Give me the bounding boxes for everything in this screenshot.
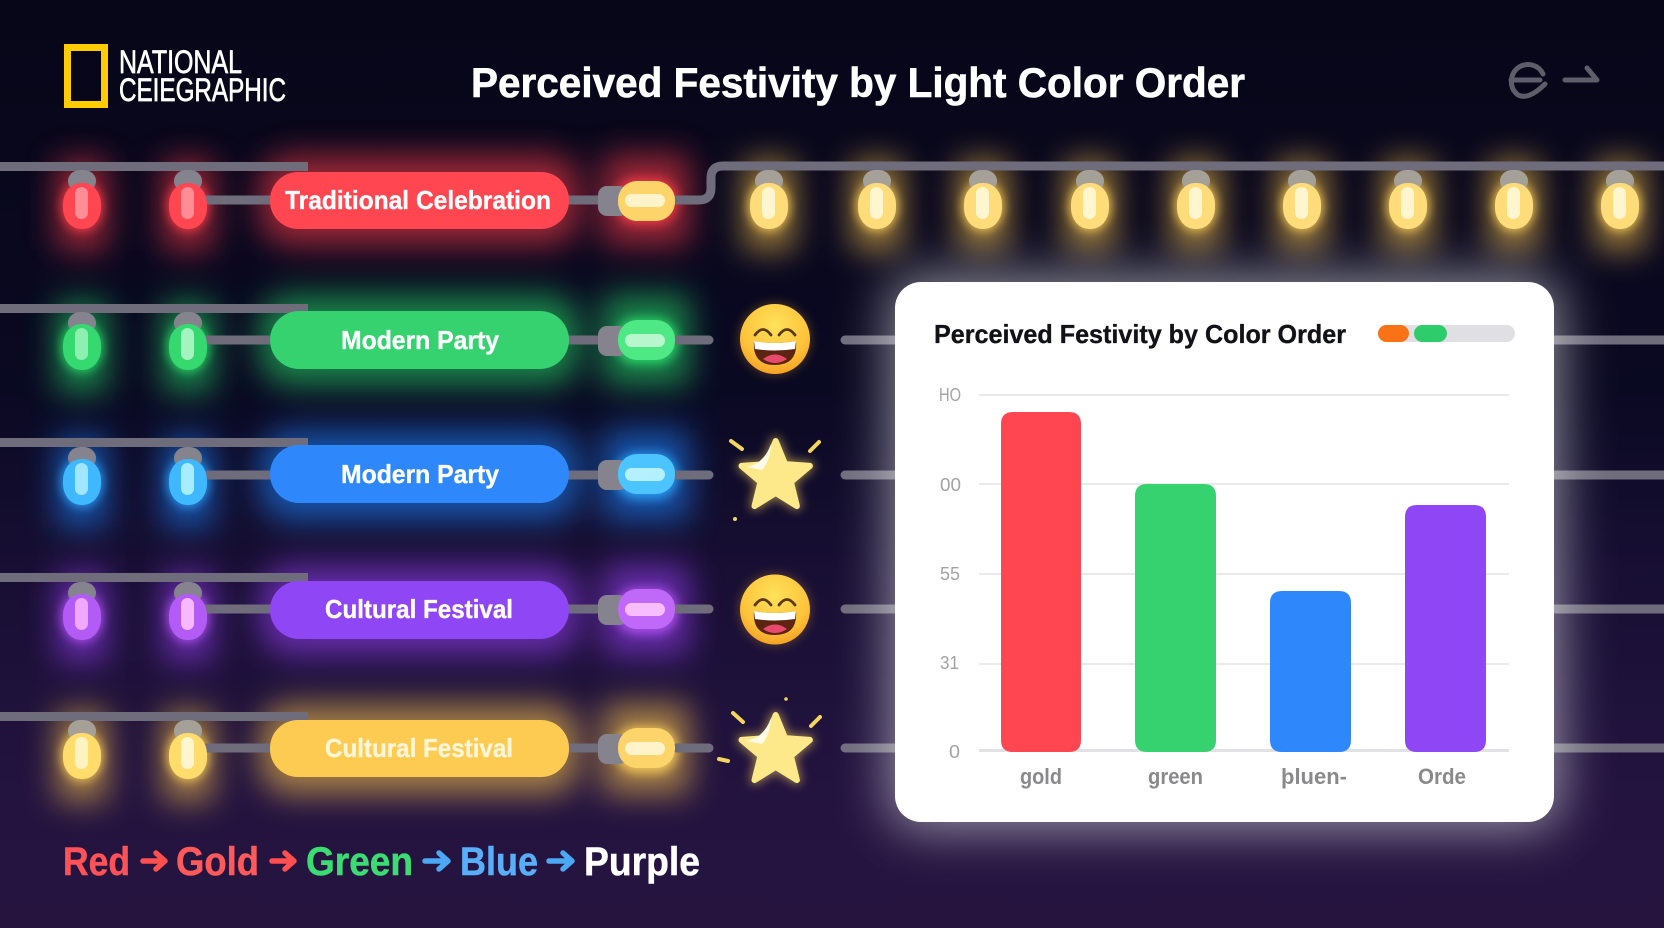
logo wordmark: CEIEGRAPHIC bbox=[119, 72, 286, 108]
color order sequence: Green bbox=[306, 840, 413, 884]
pill: Modern Party bbox=[270, 445, 569, 503]
bar chart bbox=[1001, 412, 1486, 752]
color order sequence bbox=[63, 840, 700, 884]
logo wordmark bbox=[119, 44, 286, 108]
row 1: Traditional Celebration bbox=[0, 162, 1664, 229]
row 3: Modern Party (blue) bbox=[0, 438, 1664, 521]
title: Perceived Festivity by Light Color Order bbox=[471, 59, 1245, 106]
y axis labels: HO bbox=[939, 385, 961, 405]
tight glows: bulbs bbox=[61, 178, 1641, 781]
y axis labels bbox=[939, 385, 961, 762]
icon: star bbox=[719, 697, 820, 780]
x axis labels: gold bbox=[1020, 764, 1062, 789]
bulbs: purple bbox=[63, 594, 207, 640]
icon: laughing face bbox=[739, 574, 811, 646]
x axis labels bbox=[1020, 764, 1466, 789]
grid lines bbox=[979, 394, 1509, 752]
icon: star bbox=[731, 441, 819, 521]
row 5: Cultural Festival (gold) bbox=[0, 697, 1664, 780]
arrow bbox=[425, 853, 448, 869]
bulbs: green bbox=[63, 324, 207, 370]
color order sequence: Red bbox=[63, 840, 130, 884]
logo bbox=[68, 44, 286, 108]
arrow bbox=[272, 853, 294, 869]
pill: Cultural Festival bbox=[270, 581, 569, 639]
x axis labels: Orde bbox=[1418, 764, 1466, 789]
logo frame bbox=[68, 48, 104, 104]
panel: chart card bbox=[895, 282, 1554, 822]
pill: Cultural Festival bbox=[270, 720, 569, 777]
x axis labels: green bbox=[1148, 764, 1203, 789]
bulb: horizontal gold bbox=[598, 181, 675, 221]
color order sequence: Blue bbox=[460, 840, 538, 884]
bulbs: gold bbox=[63, 733, 207, 779]
color order sequence: Gold bbox=[176, 840, 259, 884]
bulb: horizontal blue bbox=[598, 454, 675, 494]
x axis labels: þluen- bbox=[1281, 764, 1347, 789]
y axis labels: 00 bbox=[940, 475, 961, 495]
bulbs: red bbox=[63, 183, 207, 229]
pill: Modern Party: Modern Party bbox=[341, 325, 500, 355]
color order sequence: Purple bbox=[584, 840, 700, 884]
pill: Modern Party bbox=[270, 311, 569, 369]
icon: top right arrow bbox=[1565, 68, 1597, 80]
card glow bbox=[890, 276, 1560, 828]
bulbs: gold string bbox=[750, 170, 1639, 229]
pill: Traditional Celebration: Traditional Celebration bbox=[285, 185, 551, 215]
bulbs: blue bbox=[63, 459, 207, 505]
legend bbox=[1378, 325, 1515, 342]
pill: Cultural Festival: Cultural Festival bbox=[325, 733, 513, 763]
logo wordmark: NATIONAL bbox=[119, 44, 242, 80]
row 4: Cultural Festival (purple) bbox=[0, 573, 1664, 646]
pill: Cultural Festival: Cultural Festival bbox=[325, 594, 513, 624]
y axis labels: 31 bbox=[940, 653, 959, 673]
bulb: horizontal purple bbox=[598, 589, 675, 629]
bulb: horizontal gold bbox=[598, 728, 675, 768]
y axis labels: 55 bbox=[940, 564, 960, 584]
arrow bbox=[143, 853, 165, 869]
pill: Modern Party: Modern Party bbox=[341, 459, 500, 489]
pill: Traditional Celebration bbox=[270, 172, 569, 229]
y axis labels: 0 bbox=[949, 742, 960, 762]
arrow bbox=[549, 853, 572, 869]
icon: laughing face bbox=[739, 303, 811, 375]
card title: Perceived Festivity by Color Order bbox=[934, 319, 1346, 349]
glows: all rows bbox=[57, 155, 1645, 801]
row 2: Modern Party (green) bbox=[0, 303, 1664, 375]
bulb: horizontal green bbox=[598, 320, 675, 360]
icon: top right globe bbox=[1511, 65, 1545, 96]
